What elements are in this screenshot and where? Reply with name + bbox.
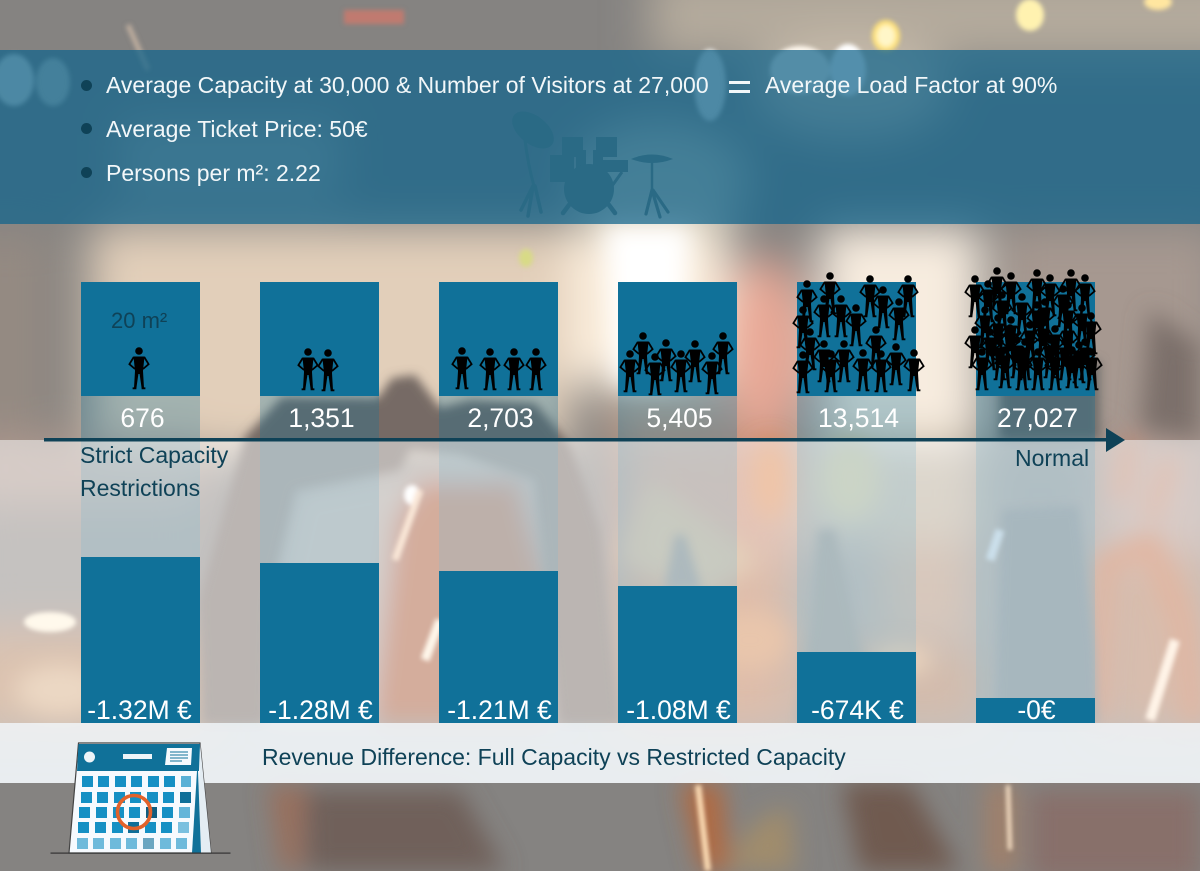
people: 2,703 <box>452 347 546 389</box>
axis label: normal: Normal <box>1015 445 1089 471</box>
revenue values: -1.21M € <box>447 695 552 725</box>
whitish lower band <box>0 440 1200 723</box>
bullet: ticket price: Average Ticket Price: 50€ <box>106 116 368 142</box>
visitor counts: 13,514 <box>818 403 899 433</box>
visitor counts <box>120 403 1078 433</box>
visitor counts: 1,351 <box>288 403 355 433</box>
load factor text: Average Load Factor at 90% <box>765 72 1057 98</box>
revenue values: -1.28M € <box>268 695 373 725</box>
revenue values: -1.32M € <box>87 695 192 725</box>
stage beam and warm streaks <box>15 226 1200 871</box>
visitor counts: 27,027 <box>997 403 1078 433</box>
people: 1,351 <box>298 348 338 390</box>
revenue bars <box>81 557 1095 723</box>
revenue values <box>87 695 1056 725</box>
bullet: capacity and visitors: Average Capacity at 30,000 & Number of Visitors at 27,000 <box>106 72 709 98</box>
people: 5,405 <box>620 332 733 394</box>
revenue values: -0€ <box>1017 695 1056 725</box>
arrow: capacity axis <box>44 428 1125 452</box>
info bullets <box>81 72 1057 186</box>
legend text: Revenue Difference: Full Capacity vs Restricted Capacity <box>262 744 846 770</box>
bullet: persons per square metre: Persons per m²: 2.22 <box>106 160 321 186</box>
axis label: strict restrictions: Strict Capacity Restrictions <box>80 442 228 500</box>
icon: calendar <box>50 742 230 854</box>
visitor counts: 2,703 <box>467 403 534 433</box>
people: 27,027 <box>965 267 1102 389</box>
icon: drum kit <box>520 132 672 218</box>
visitor counts: 676 <box>120 403 165 433</box>
silhouettes of raised arms <box>199 360 1100 723</box>
area label: 20 m² <box>111 308 167 333</box>
revenue values: -674K € <box>811 695 904 725</box>
teal info band <box>0 50 1200 224</box>
blue capacity squares <box>81 282 1095 396</box>
visitor counts: 5,405 <box>646 403 713 433</box>
people: 13,514 <box>793 272 924 392</box>
legend band <box>0 723 1200 783</box>
revenue values: -1.08M € <box>626 695 731 725</box>
people: 676 <box>129 347 149 388</box>
equals sign <box>729 81 750 93</box>
